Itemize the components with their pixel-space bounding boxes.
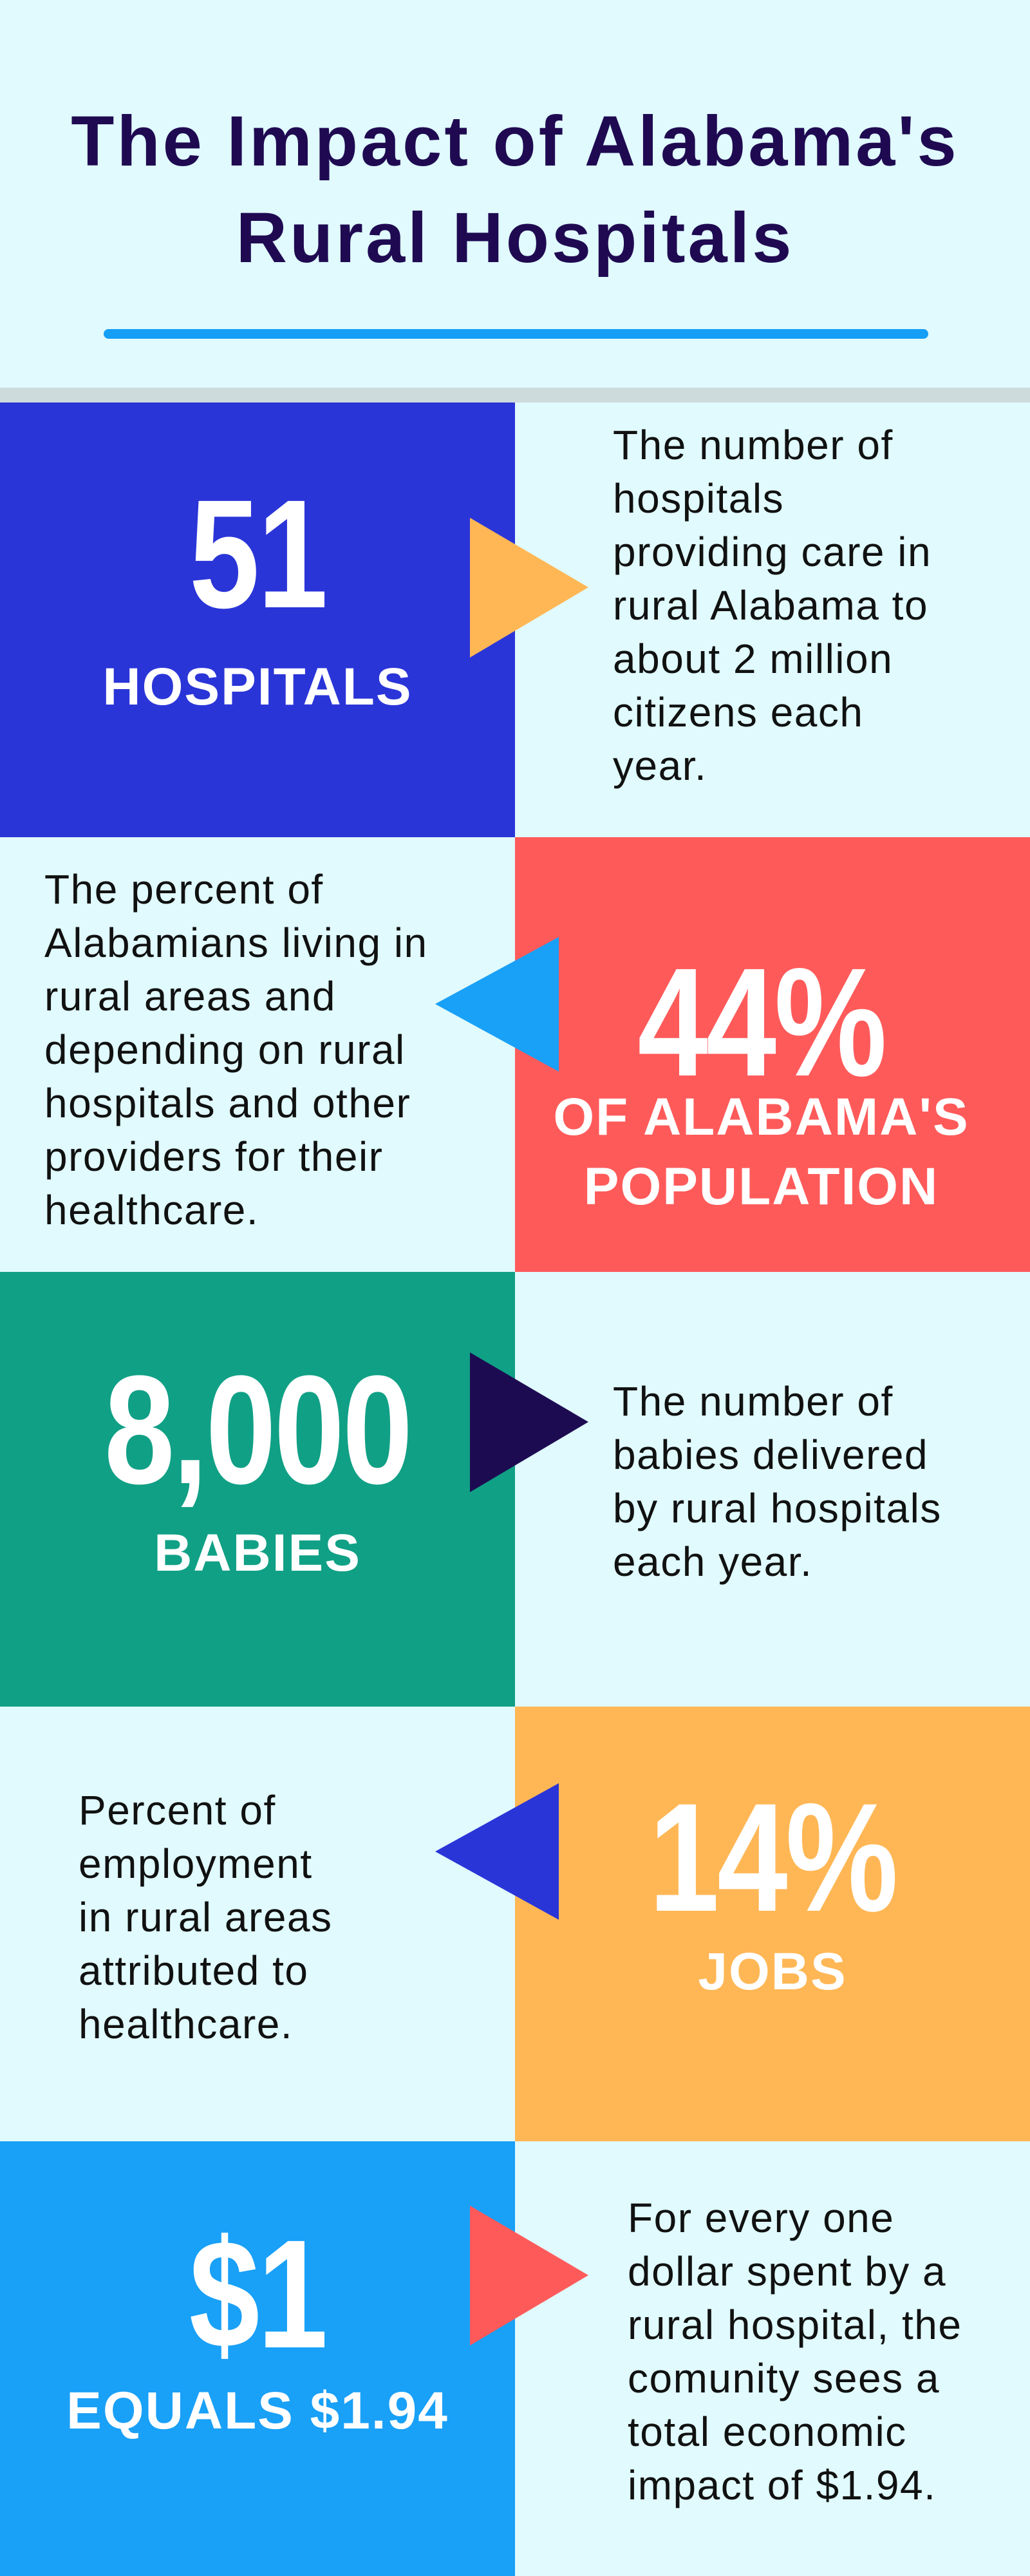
description text: babies delivered: [613, 1432, 928, 1478]
description text: [628, 2195, 962, 2508]
panel: economic impact: [0, 2141, 962, 2576]
description text: rural areas and: [44, 973, 336, 1019]
big number 51: 51: [189, 468, 326, 640]
description text: [613, 1378, 942, 1585]
description text: hospitals: [613, 475, 784, 522]
description text: employment: [79, 1841, 313, 1887]
label population: [553, 1088, 969, 1216]
description text: depending on rural: [44, 1027, 406, 1073]
big number 8,000: 8,000: [104, 1343, 411, 1516]
description text: comunity sees a: [628, 2355, 940, 2401]
stat box: $1: [0, 2141, 515, 2576]
description text: The percent of: [44, 866, 324, 913]
label babies: BABIES: [154, 1524, 361, 1582]
description text: in rural areas: [79, 1894, 332, 1940]
title: Rural Hospitals: [236, 198, 794, 278]
description text: impact of $1.94.: [628, 2462, 936, 2508]
description text: [79, 1787, 332, 2047]
description text: providers for their: [44, 1133, 383, 1180]
arrow: yellow right: [470, 518, 588, 658]
arrow: red right: [470, 2206, 588, 2345]
panel: population: [44, 837, 1030, 1272]
description text: providing care in: [613, 529, 932, 575]
description text: dollar spent by a: [628, 2248, 946, 2295]
description text: rural hospital, the: [628, 2302, 962, 2348]
panel: jobs: [79, 1707, 1030, 2141]
big number 14%: 14%: [649, 1771, 896, 1944]
description text: healthcare.: [44, 1187, 259, 1233]
stat box: 44%: [515, 837, 1030, 1272]
label jobs: JOBS: [698, 1942, 847, 2001]
description text: by rural hospitals: [613, 1485, 942, 1531]
description text: total economic: [628, 2409, 907, 2455]
stat box: 14% jobs: [515, 1707, 1030, 2141]
description text: each year.: [613, 1539, 812, 1585]
arrow: navy right: [470, 1352, 588, 1492]
description text: rural Alabama to: [613, 582, 928, 629]
description text: [613, 422, 932, 789]
description text: Percent of: [79, 1787, 276, 1833]
big number 44%: 44%: [637, 936, 885, 1108]
description text: The number of: [613, 1378, 894, 1425]
description text: citizens each: [613, 689, 863, 735]
description text: hospitals and other: [44, 1080, 411, 1126]
label hospitals: HOSPITALS: [102, 658, 413, 716]
description text: For every one: [628, 2195, 894, 2241]
arrow: blue left: [435, 937, 559, 1072]
big number $1: $1: [189, 2208, 326, 2380]
description text: about 2 million: [613, 636, 893, 682]
title: [71, 102, 959, 278]
description text: The number of: [613, 422, 894, 468]
panel: babies: [0, 1272, 942, 1707]
title underline: [104, 329, 928, 339]
stat box: 8,000 babies: [0, 1272, 515, 1707]
stat box: 51 hospitals: [0, 402, 515, 837]
label equals: EQUALS $1.94: [66, 2382, 449, 2440]
description text: [44, 866, 428, 1233]
divider bar: [0, 388, 1030, 402]
label population: POPULATION: [584, 1157, 939, 1216]
title: The Impact of Alabama's: [71, 102, 959, 181]
arrow: blue left: [435, 1783, 559, 1920]
panel: hospitals: [0, 402, 932, 837]
label population: OF ALABAMA'S: [553, 1088, 969, 1146]
description text: Alabamians living in: [44, 920, 428, 966]
description text: attributed to: [79, 1947, 309, 1994]
description text: year.: [613, 743, 707, 789]
description text: healthcare.: [79, 2001, 293, 2047]
